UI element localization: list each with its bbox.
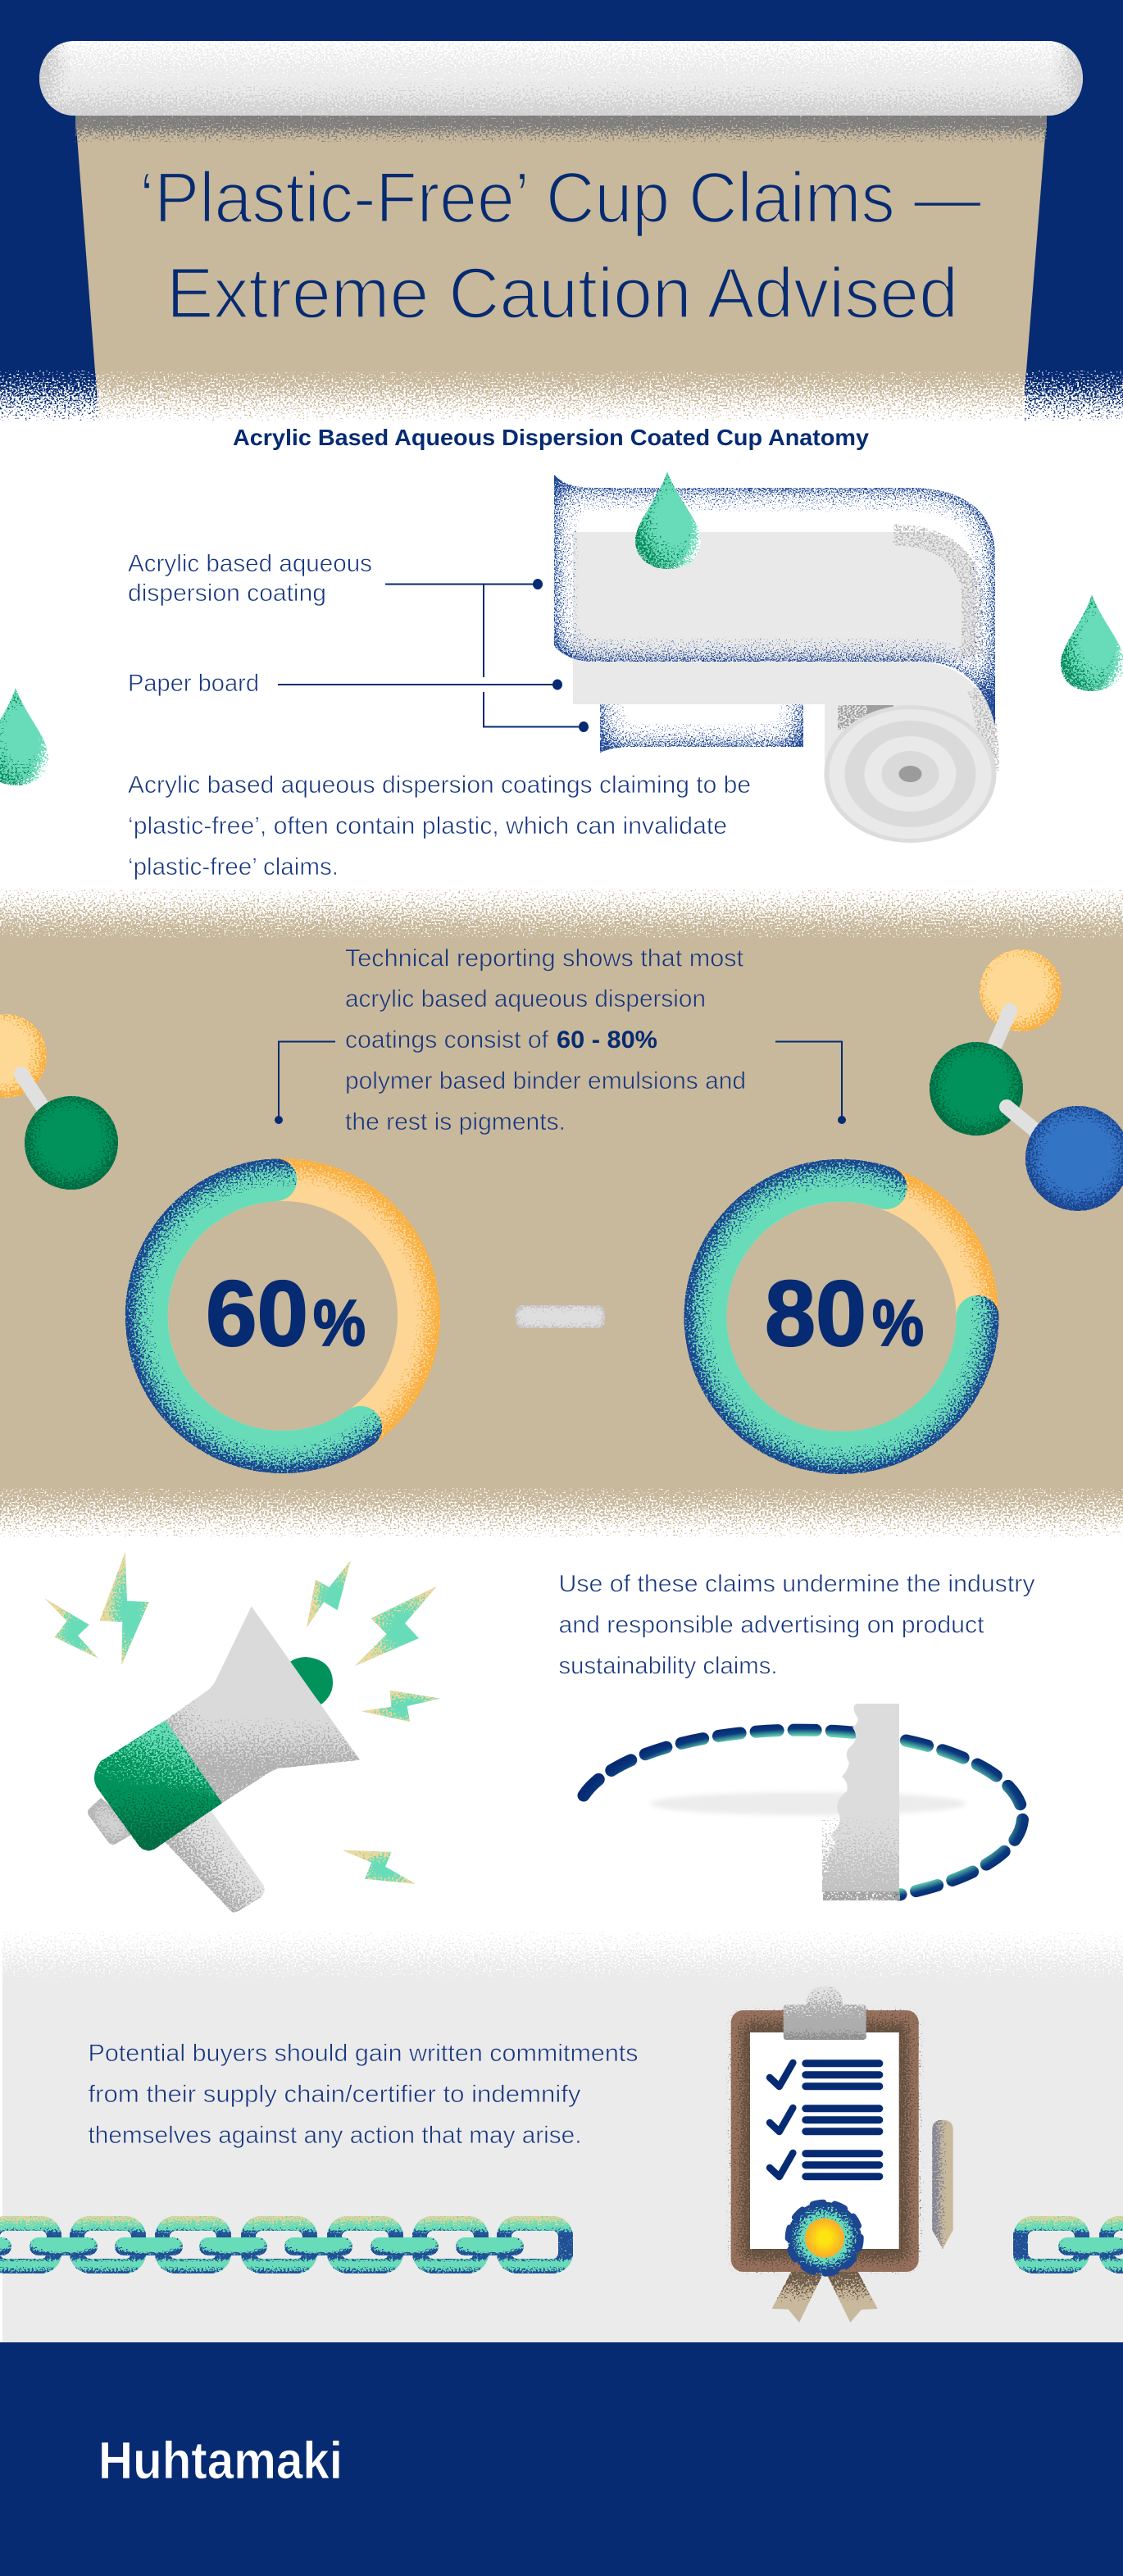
pencil (932, 2120, 953, 2249)
cup body grain base (95, 371, 1026, 421)
text: potential buyers: Potential buyers should gain written commitments (89, 2040, 638, 2067)
board (731, 2010, 919, 2272)
icon: molecule right (930, 949, 1123, 1211)
panel: tan statistics section (0, 888, 1123, 1538)
donut chart: 60% (147, 1180, 419, 1452)
text: technical reporting: Technical reporting shows that most (345, 944, 744, 972)
icon: chain left (0, 2223, 566, 2266)
text: technical reporting: acrylic based aqueous dispersion (345, 985, 706, 1013)
value: 80%: 80 (765, 1262, 866, 1365)
paper inner panel (573, 532, 975, 662)
text: use of these claims: Use of these claims undermine the industry (559, 1571, 1034, 1597)
rim shadow (75, 116, 1047, 143)
value: 60%: % (313, 1286, 366, 1359)
paper sheet (741, 2022, 909, 2260)
leader lines (278, 580, 588, 731)
text: potential buyers (89, 2040, 638, 2149)
heading: cup anatomy: Acrylic Based Aqueous Dispersion Coated Cup Anatomy (233, 425, 870, 450)
text: potential buyers: themselves against any action that may arise. (89, 2122, 582, 2149)
text: coating explanation: Acrylic based aqueous dispersion coatings claiming to be (128, 771, 751, 799)
panel: footer (0, 2342, 1123, 2576)
title: Extreme Caution Advised (166, 254, 958, 333)
lower coating layer (600, 648, 803, 753)
paper roll (825, 705, 997, 843)
title: ‘Plastic-Free’ Cup Claims — (139, 158, 981, 238)
panel: advertising section (45, 1552, 1034, 1912)
title (139, 158, 981, 333)
cup rim (39, 41, 1083, 116)
donut chart: 80% (705, 1181, 977, 1453)
text: coating explanation: ‘plastic-free’, often contain plastic, which can invalidate (128, 812, 727, 840)
paper board layer (573, 662, 995, 775)
text: coating explanation: ‘plastic-free’ claims. (128, 853, 339, 881)
panel: header with navy background and cup (0, 0, 1123, 421)
text: technical reporting: polymer based binder emulsions and (345, 1067, 746, 1095)
text: use of these claims: and responsible advertising on product (559, 1612, 984, 1638)
icon: molecule left (0, 1014, 118, 1190)
cup body (75, 116, 1047, 371)
value: 80%: % (872, 1286, 924, 1359)
icon: clipboard with seal (731, 1987, 953, 2323)
label: acrylic coating (128, 550, 372, 607)
value: 60%: 60 (206, 1262, 308, 1365)
seal ribbons (772, 2264, 878, 2323)
icon: droplet right (1061, 594, 1123, 691)
text: potential buyers: from their supply chain/certifier to indemnify (89, 2081, 580, 2108)
icon: droplet left (0, 688, 48, 785)
checklist (770, 2059, 883, 2180)
clip (784, 1987, 866, 2040)
upper coating layer (554, 475, 995, 726)
icon: chain right (1021, 2223, 1123, 2266)
text: technical reporting: the rest is pigments. (345, 1108, 566, 1136)
text: technical reporting: 60 - 80% (557, 1026, 657, 1054)
label: acrylic coating: dispersion coating (128, 580, 326, 607)
saw shadow (650, 1792, 966, 1815)
dashed ring (584, 1730, 1023, 1895)
icon: droplet on cup (635, 471, 701, 569)
text: technical reporting: coatings consist of (345, 1026, 549, 1054)
logo: Huhtamaki: Huhtamaki (98, 2431, 343, 2490)
text: use of these claims: sustainability claims. (559, 1653, 777, 1679)
panel: cup anatomy diagram (0, 471, 1123, 881)
bracket right (775, 1041, 846, 1124)
panel: potential buyers section (0, 1931, 1123, 2342)
icon: megaphone (88, 1606, 360, 1912)
text: technical reporting (345, 944, 746, 1136)
label: acrylic coating: Acrylic based aqueous (128, 550, 372, 577)
bracket left (275, 1041, 335, 1124)
label: paper board: Paper board (128, 670, 259, 697)
paper roll shading (838, 705, 893, 730)
icon: cut dashed ring and saw (584, 1704, 1023, 1900)
saw blade (822, 1704, 900, 1900)
icons: lightning bolts (45, 1552, 440, 1884)
paper fold shading (893, 535, 989, 771)
text: use of these claims (559, 1571, 1034, 1679)
dash between values (516, 1305, 605, 1328)
text: coating explanation (128, 771, 751, 881)
seal (788, 2202, 862, 2274)
